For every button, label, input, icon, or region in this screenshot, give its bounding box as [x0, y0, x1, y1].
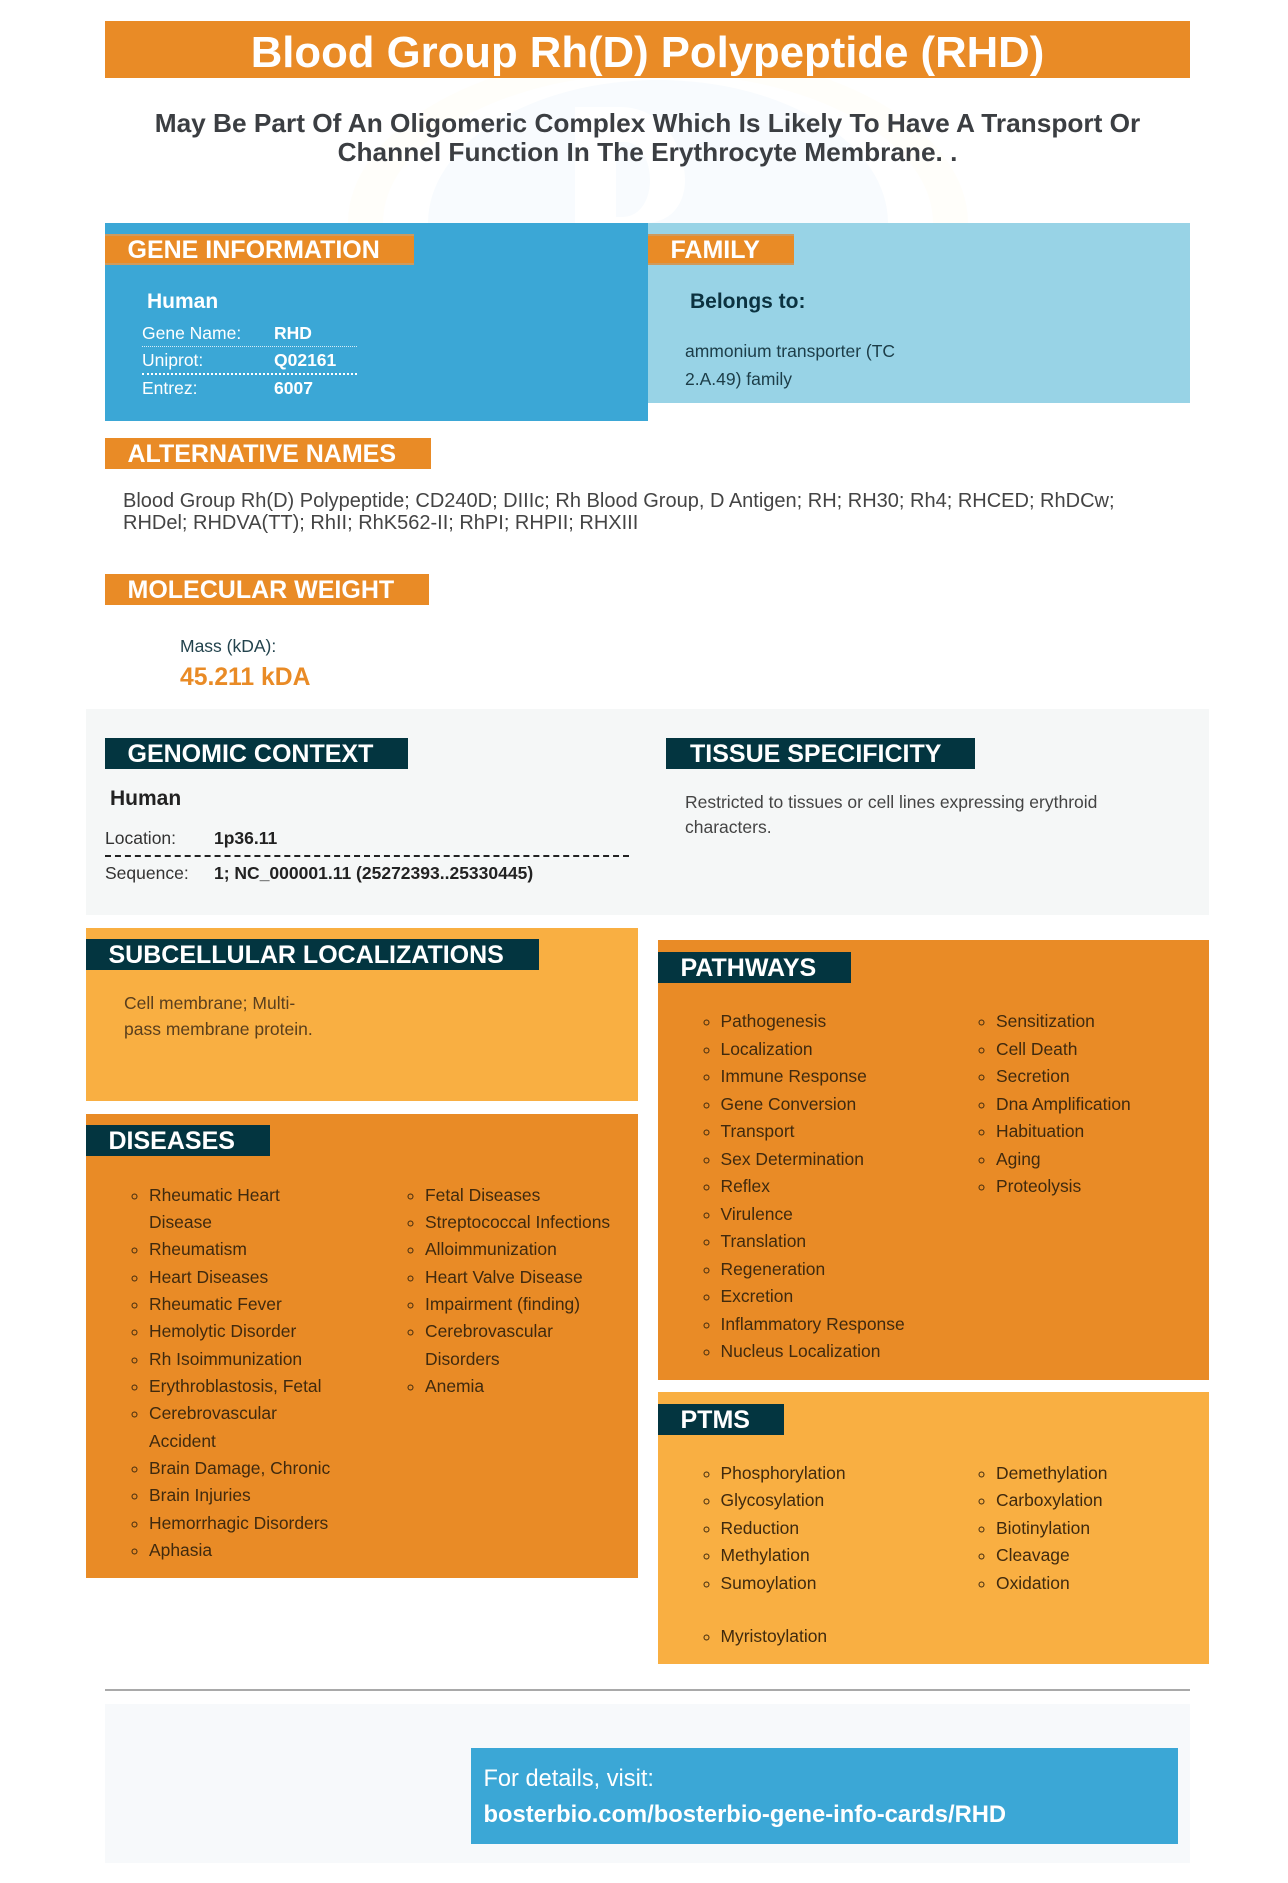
family text [685, 340, 895, 388]
entrez row: 6007 [274, 378, 313, 398]
disease list column 1: Rheumatism [149, 1239, 247, 1259]
pathway list column 1: Virulence [720, 1204, 793, 1224]
callout text: For details, visit: [484, 1766, 654, 1792]
alternative names text [123, 490, 1115, 534]
belongs to label: Belongs to: [690, 290, 806, 313]
pathway list column 1: Immune Response [720, 1066, 867, 1086]
panel: gene information [105, 223, 648, 421]
pathway list column 2: Dna Amplification [996, 1094, 1131, 1114]
alternative names text: Blood Group Rh(D) Polypeptide; CD240D; DIIIc; Rh Blood Group, D Antigen; RH; RH30; Rh4; RHCED; RhDCw; [123, 490, 1115, 512]
callout: details link [470, 1748, 1178, 1844]
disease list column 2: Disorders [425, 1349, 500, 1369]
ptm list column 2: Carboxylation [996, 1490, 1103, 1510]
pathway list column 1: Translation [720, 1231, 806, 1251]
disease list column 1: Disease [149, 1212, 212, 1232]
disease list column 1: Hemorrhagic Disorders [149, 1513, 328, 1533]
pathway list column 1: Pathogenesis [720, 1011, 826, 1031]
ptm list column 2: Oxidation [996, 1572, 1070, 1592]
subtitle: Channel Function In The Erythrocyte Membrane. . [338, 136, 957, 166]
disease list column 2: Streptococcal Infections [425, 1212, 610, 1232]
disease list column 2: Cerebrovascular [425, 1321, 553, 1341]
heading: pathways: PATHWAYS [680, 954, 816, 982]
disease list column 2: Heart Valve Disease [425, 1267, 583, 1287]
pathway list column 1: Inflammatory Response [720, 1314, 905, 1334]
pathway list column 1: Nucleus Localization [720, 1341, 880, 1361]
panel: family [648, 223, 1190, 403]
gene name row: Gene Name: [142, 323, 241, 343]
family text: 2.A.49) family [685, 368, 792, 388]
ptm list column 1: Myristoylation [720, 1626, 827, 1646]
title banner [105, 21, 1190, 78]
disease list column 2: Anemia [425, 1376, 484, 1396]
pathway list column 2: Cell Death [996, 1038, 1077, 1058]
disease list column 1: Aphasia [149, 1540, 212, 1560]
pathway list column 1: Localization [720, 1038, 813, 1058]
tissue specificity text: characters. [685, 817, 772, 837]
alternative names text: RHDel; RHDVA(TT); RhII; RhK562-II; RhPI; RHPII; RHXIII [123, 512, 638, 534]
ptm list column 1: Sumoylation [720, 1572, 816, 1592]
ptm list column 1: Glycosylation [720, 1490, 824, 1510]
localization text: Cell membrane; Multi- [124, 993, 295, 1013]
disease list column 1 [132, 1185, 330, 1560]
pathway list column 2 [978, 1011, 1131, 1196]
heading: family: FAMILY [670, 236, 760, 264]
pathway list column 1: Reflex [720, 1176, 770, 1196]
heading: gene information: GENE INFORMATION [128, 236, 380, 264]
ptm list column 1: Methylation [720, 1545, 810, 1565]
family text: ammonium transporter (TC [685, 340, 895, 360]
panel: subcellular localizations [86, 928, 638, 1101]
location row [105, 828, 277, 848]
entrez row: Entrez: [142, 378, 197, 398]
gene name row: RHD [274, 323, 312, 343]
pathway list column 1: Gene Conversion [720, 1094, 856, 1114]
tissue specificity text: Restricted to tissues or cell lines expressing erythroid [685, 792, 1097, 812]
entrez row [142, 378, 313, 398]
localization text [124, 993, 313, 1039]
heading: tissue specificity: TISSUE SPECIFICITY [690, 740, 941, 768]
panel: footer [105, 1704, 1190, 1863]
pathway list column 1: Excretion [720, 1286, 793, 1306]
disease list column 1: Erythroblastosis, Fetal [149, 1376, 322, 1396]
location row: Location: [105, 828, 176, 848]
ptm list column 1: Phosphorylation [720, 1462, 846, 1482]
species label: Human [110, 787, 181, 810]
sequence row: Sequence: [105, 863, 189, 883]
mass value: 45.211 kDA [180, 664, 310, 691]
pathway list column 1 [704, 1011, 905, 1361]
panel: genomic context and tissue specificity [86, 709, 1209, 915]
disease list column 1: Brain Injuries [149, 1485, 251, 1505]
panel: ptms [658, 1392, 1209, 1664]
heading: subcellular localizations: SUBCELLULAR LOCALIZATIONS [108, 941, 504, 969]
ptm list column 2 [978, 1462, 1107, 1592]
heading: pathways [658, 952, 851, 983]
heading: ptms: PTMS [680, 1406, 750, 1434]
disease list column 2: Alloimmunization [425, 1239, 557, 1259]
pathway list column 2: Aging [996, 1148, 1041, 1168]
disease list column 2: Impairment (finding) [425, 1294, 580, 1314]
pathway list column 2: Sensitization [996, 1011, 1095, 1031]
pathway list column 1: Sex Determination [720, 1148, 864, 1168]
uniprot row: Q02161 [274, 350, 336, 370]
callout url: bosterbio.com/bosterbio-gene-info-cards/RHD [484, 1800, 1006, 1828]
disease list column 2: Fetal Diseases [425, 1185, 540, 1205]
pathway list column 1: Transport [720, 1121, 794, 1141]
title banner: Blood Group Rh(D) Polypeptide (RHD) [251, 28, 1044, 77]
subtitle [155, 108, 1140, 166]
uniprot row [142, 350, 336, 370]
background watermark logo [330, 70, 980, 223]
heading: diseases [86, 1125, 270, 1156]
heading: alternative names: ALTERNATIVE NAMES [128, 440, 396, 468]
sequence row: 1; NC_000001.11 (25272393..25330445) [214, 863, 533, 883]
heading: family [648, 234, 794, 265]
disease list column 1: Rheumatic Heart [149, 1185, 280, 1205]
gene name row [142, 323, 312, 343]
heading: ptms [658, 1404, 784, 1435]
ptm list column 2: Biotinylation [996, 1518, 1090, 1538]
ptm list column 1: Reduction [720, 1518, 799, 1538]
pathway list column 2: Proteolysis [996, 1176, 1081, 1196]
panel: pathways [658, 940, 1209, 1380]
mass label: Mass (kDA): [180, 636, 276, 656]
localization text: pass membrane protein. [124, 1019, 313, 1039]
subtitle: May Be Part Of An Oligomeric Complex Which Is Likely To Have A Transport Or [155, 108, 1140, 138]
ptm list column 1 [704, 1462, 846, 1646]
heading: genomic context: GENOMIC CONTEXT [128, 740, 373, 768]
disease list column 1: Rh Isoimmunization [149, 1349, 302, 1369]
species label: Human [147, 290, 218, 313]
tissue specificity text [685, 792, 1097, 837]
uniprot row: Uniprot: [142, 350, 203, 370]
disease list column 2 [408, 1185, 610, 1396]
location row: 1p36.11 [214, 828, 277, 848]
disease list column 1: Accident [149, 1431, 216, 1451]
disease list column 1: Brain Damage, Chronic [149, 1458, 330, 1478]
pathway list column 1: Regeneration [720, 1258, 825, 1278]
disease list column 1: Rheumatic Fever [149, 1294, 282, 1314]
heading: molecular weight: MOLECULAR WEIGHT [128, 576, 394, 604]
ptm list column 2: Demethylation [996, 1462, 1107, 1482]
disease list column 1: Cerebrovascular [149, 1403, 277, 1423]
disease list column 1: Hemolytic Disorder [149, 1321, 296, 1341]
pathway list column 2: Secretion [996, 1066, 1070, 1086]
disease list column 1: Heart Diseases [149, 1267, 268, 1287]
heading: diseases: DISEASES [108, 1127, 235, 1155]
panel: diseases [86, 1114, 638, 1578]
ptm list column 2: Cleavage [996, 1545, 1070, 1565]
pathway list column 2: Habituation [996, 1121, 1084, 1141]
